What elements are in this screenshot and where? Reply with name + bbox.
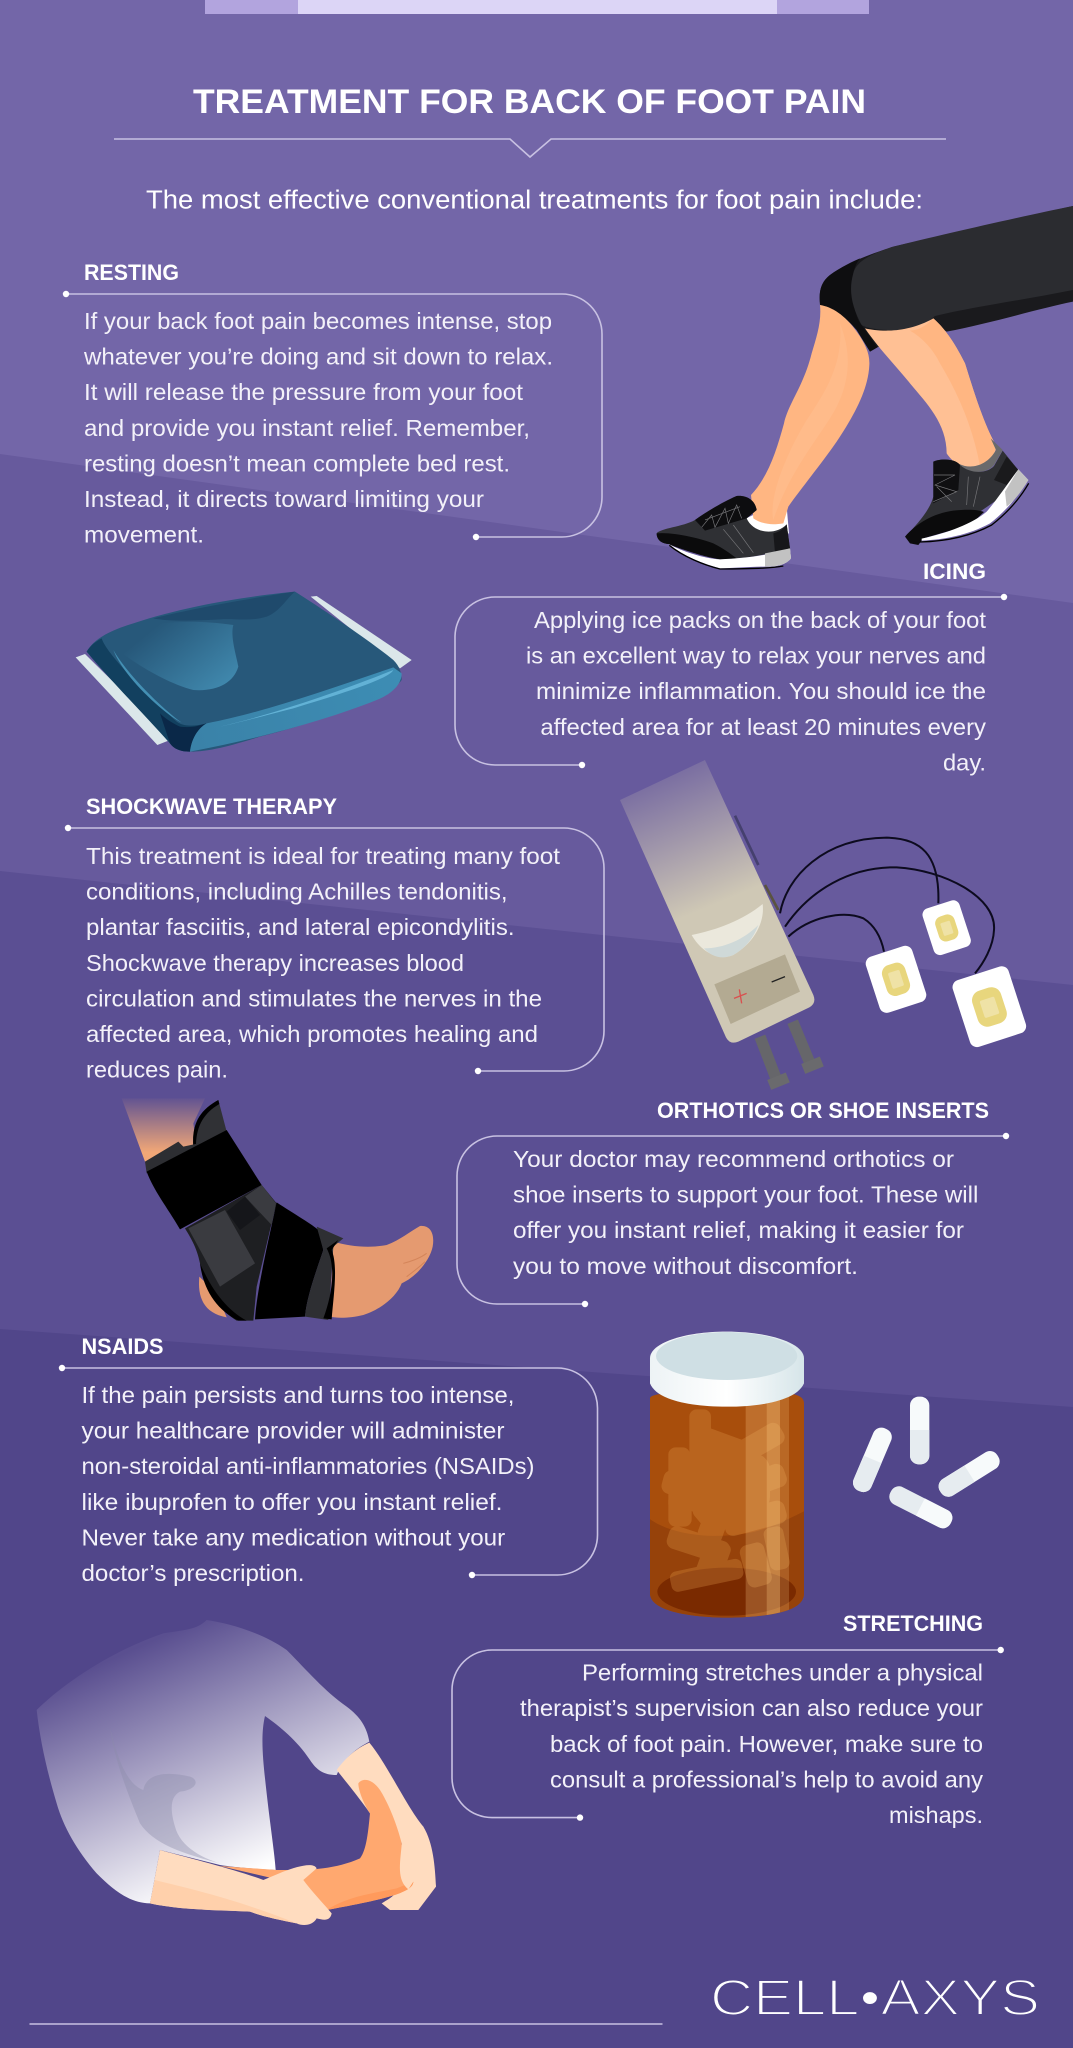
nsaids body text: like ibuprofen to offer you instant relief. — [82, 1489, 502, 1515]
nsaids body text: non-steroidal anti-inflammatories (NSAIDs) — [82, 1453, 534, 1479]
icing body text: day. — [943, 749, 986, 775]
illustration: foot stretch — [37, 1620, 436, 1925]
orthotics connector — [457, 1133, 1009, 1307]
illustration: ice pack — [76, 592, 412, 752]
panel: resting — [63, 260, 602, 548]
resting body text: It will release the pressure from your foot — [84, 379, 523, 405]
panel: shockwave therapy — [65, 794, 604, 1083]
shockwave body text — [86, 843, 560, 1083]
stretching heading: STRETCHING — [843, 1611, 983, 1636]
resting body text — [83, 308, 553, 548]
resting body text: movement. — [84, 522, 204, 548]
stretching body text: Performing stretches under a physical — [582, 1660, 983, 1686]
subtitle: The most effective conventional treatments for foot pain include: — [146, 186, 923, 214]
orthotics body text: offer you instant relief, making it easier for — [513, 1217, 964, 1243]
top tab bar — [205, 0, 869, 14]
bottle — [647, 1387, 807, 1620]
illustration: pill bottle and pills — [647, 1332, 1003, 1620]
illustration: ankle brace — [122, 1098, 433, 1321]
nsaids body text: Never take any medication without your — [82, 1524, 505, 1550]
panel: nsaids — [59, 1334, 598, 1586]
shockwave connector — [65, 825, 604, 1074]
icing body text: minimize inflammation. You should ice the — [536, 678, 986, 704]
title: TREATMENT FOR BACK OF FOOT PAIN — [193, 83, 866, 121]
nsaids body text: your healthcare provider will administer — [82, 1418, 505, 1444]
footer rule — [30, 2023, 662, 2025]
icing heading: ICING — [923, 559, 986, 584]
resting body text: and provide you instant relief. Remember, — [84, 415, 530, 441]
stretching body text: therapist’s supervision can also reduce your — [520, 1695, 983, 1721]
shockwave body text: plantar fasciitis, and lateral epicondylitis. — [86, 914, 514, 940]
panel: icing — [455, 559, 1007, 775]
nsaids connector — [59, 1365, 598, 1578]
orthotics heading: ORTHOTICS OR SHOE INSERTS — [657, 1098, 989, 1123]
cap — [650, 1332, 804, 1407]
resting heading: RESTING — [84, 260, 179, 285]
panel: stretching — [452, 1611, 1004, 1828]
title divider with notch — [114, 139, 946, 157]
orthotics body text: shoe inserts to support your foot. These will — [513, 1182, 978, 1208]
orthotics body text — [513, 1146, 978, 1279]
nsaids heading: NSAIDS — [82, 1334, 164, 1359]
orthotics body text: Your doctor may recommend orthotics or — [513, 1146, 954, 1172]
illustration: shockwave device — [620, 760, 1028, 1090]
stretching connector — [452, 1647, 1004, 1821]
nsaids body text: If the pain persists and turns too intense, — [82, 1382, 514, 1408]
shockwave body text: conditions, including Achilles tendonitis, — [86, 879, 508, 905]
stretching body text: consult a professional’s help to avoid any — [550, 1766, 983, 1792]
nsaids body text: doctor’s prescription. — [82, 1560, 304, 1586]
logo: Cellaxys: CELL•AXYS — [710, 1969, 1040, 2026]
resting body text: Instead, it directs toward limiting your — [84, 486, 484, 512]
orthotics body text: you to move without discomfort. — [513, 1253, 858, 1279]
shockwave heading: SHOCKWAVE THERAPY — [86, 794, 337, 819]
resting body text: whatever you’re doing and sit down to relax. — [83, 344, 553, 370]
shockwave body text: Shockwave therapy increases blood — [86, 950, 464, 976]
stretching body text — [520, 1660, 983, 1828]
icing body text — [526, 607, 986, 775]
resting connector — [63, 291, 602, 540]
resting body text: resting doesn’t mean complete bed rest. — [84, 450, 510, 476]
shockwave body text: affected area, which promotes healing and — [86, 1021, 538, 1047]
shockwave body text: reduces pain. — [86, 1057, 228, 1083]
sock under leg — [746, 507, 789, 537]
icing body text: affected area for at least 20 minutes every — [540, 714, 986, 740]
shockwave body text: circulation and stimulates the nerves in the — [86, 985, 542, 1011]
stretching body text: back of foot pain. However, make sure to — [550, 1731, 983, 1757]
icing body text: is an excellent way to relax your nerves and — [526, 643, 986, 669]
panel: orthotics or shoe inserts — [457, 1098, 1009, 1307]
icing connector — [455, 594, 1007, 768]
resting body text: If your back foot pain becomes intense, stop — [84, 308, 552, 334]
nsaids body text — [82, 1382, 534, 1586]
loose pills — [850, 1397, 1003, 1531]
illustration: running legs — [657, 206, 1073, 569]
stretching body text: mishaps. — [889, 1802, 983, 1828]
icing body text: Applying ice packs on the back of your foot — [534, 607, 986, 633]
shockwave body text: This treatment is ideal for treating many foot — [86, 843, 560, 869]
